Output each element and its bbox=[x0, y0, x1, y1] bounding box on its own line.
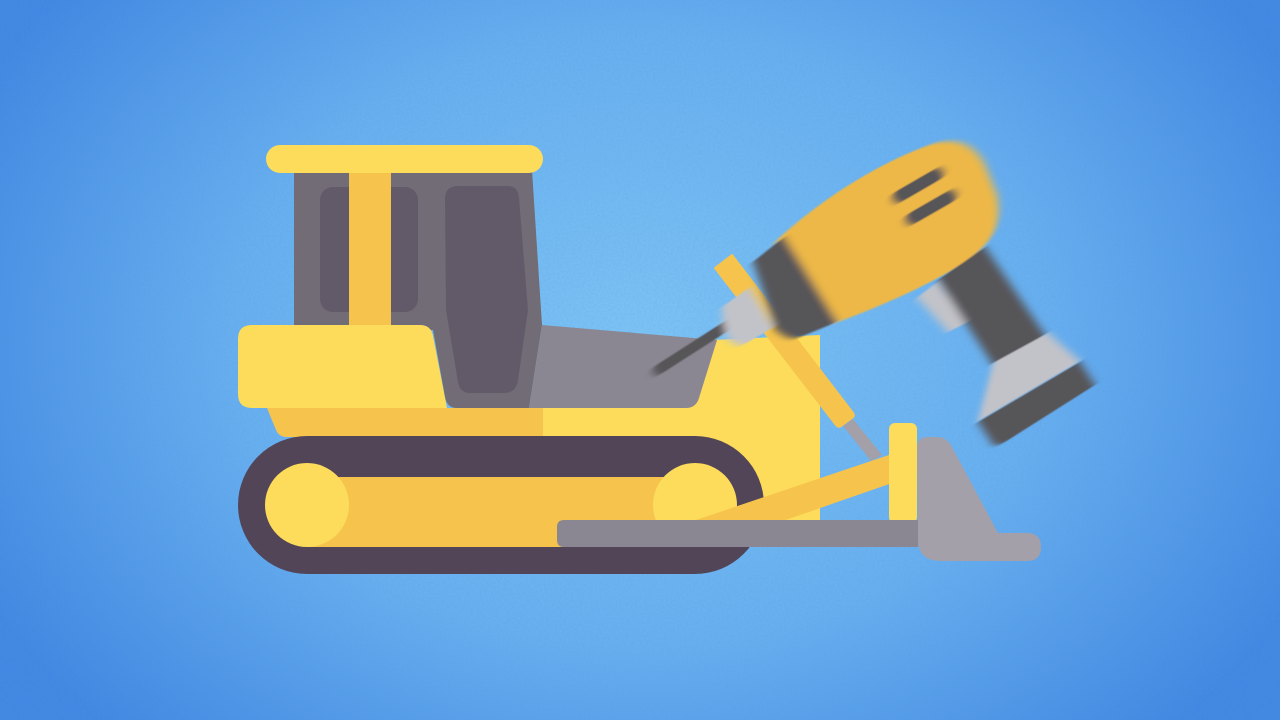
track inner bbox=[307, 477, 695, 547]
handle collar bbox=[978, 333, 1080, 421]
body lower band bbox=[543, 408, 820, 437]
rear yellow body panel bbox=[540, 335, 820, 520]
engine hood bbox=[529, 325, 717, 408]
track bbox=[238, 436, 764, 574]
blade yellow mount bbox=[889, 423, 917, 523]
hydraulic arm bbox=[715, 255, 882, 461]
cab roof bbox=[266, 145, 543, 173]
arm rod bbox=[843, 419, 882, 461]
cab window right bbox=[445, 186, 528, 393]
arm cylinder bbox=[715, 255, 854, 427]
jackhammer bbox=[527, 0, 1226, 634]
rear wheel bbox=[265, 463, 349, 547]
blade base bar bbox=[557, 520, 918, 547]
cab window left bbox=[320, 187, 418, 312]
hammer body bbox=[775, 141, 998, 322]
chuck bbox=[722, 287, 774, 345]
blade assembly bbox=[557, 423, 1041, 561]
handle grip bbox=[978, 362, 1095, 445]
cab frame bbox=[294, 170, 542, 408]
dark band bbox=[753, 237, 837, 338]
blade bbox=[917, 437, 1041, 561]
front hood block bbox=[238, 325, 447, 408]
vent lower bbox=[911, 196, 951, 219]
front wheel bbox=[653, 463, 737, 547]
chisel bbox=[658, 327, 725, 370]
vent upper bbox=[898, 174, 938, 197]
bulldozer bbox=[238, 145, 820, 574]
blade push arm bbox=[690, 454, 892, 522]
cab pillar bbox=[349, 170, 391, 330]
handle shaft bbox=[938, 247, 1045, 365]
body lower band shadow bbox=[267, 408, 543, 437]
handle rear support bbox=[917, 282, 968, 332]
